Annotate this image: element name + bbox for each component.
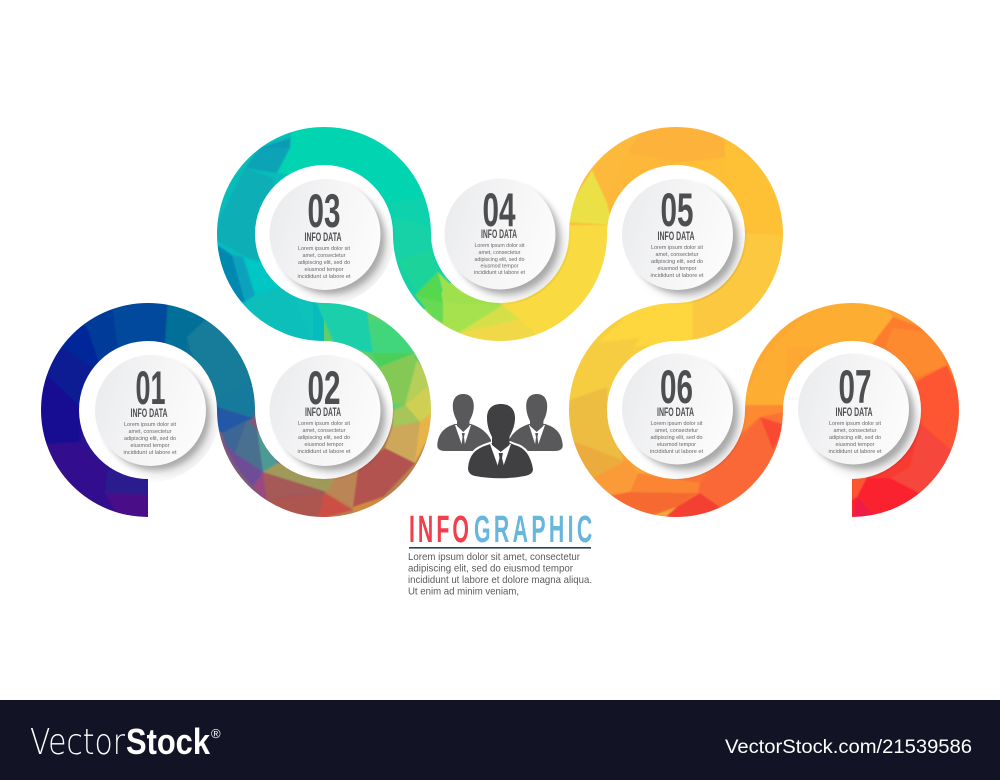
body text: incididunt ut labore et — [124, 450, 177, 456]
body text: eiusmod tempor — [658, 266, 697, 272]
label: INFO DATA — [481, 227, 517, 241]
body text: eiusmod tempor — [657, 442, 696, 448]
body text: adipiscing elit, sed do — [474, 257, 524, 263]
footer logo: Stock — [126, 721, 211, 762]
body text: Lorem ipsum dolor sit — [651, 245, 703, 251]
body text: incididunt ut labore et — [650, 273, 704, 279]
body text — [474, 243, 525, 276]
label: INFO DATA — [130, 406, 168, 420]
body text: Lorem ipsum dolor sit — [650, 421, 703, 427]
body text: amet, consectetur — [302, 428, 346, 434]
description paragraph: incididunt ut labore et dolore magna aliqua. — [408, 575, 592, 586]
number 06: 06 — [660, 361, 693, 414]
description paragraph — [408, 552, 592, 598]
footer logo: ® — [211, 726, 221, 741]
body text: adipiscing elit, sed do — [650, 435, 702, 441]
footer logo: Vector — [30, 722, 125, 763]
disc 05 — [622, 179, 742, 299]
body text: incididunt ut labore et — [828, 449, 882, 455]
description paragraph: adipiscing elit, sed do eiusmod tempor — [408, 564, 573, 574]
body text: Lorem ipsum dolor sit — [829, 421, 881, 427]
label: INFO DATA — [305, 405, 341, 419]
body text: eiusmod tempor — [304, 267, 344, 273]
label: INFO DATA — [304, 230, 342, 244]
body text: amet, consectetur — [302, 253, 346, 259]
disc 02 — [270, 355, 389, 475]
body text — [298, 246, 351, 280]
body text: amet, consectetur — [478, 250, 521, 256]
body text: incididunt ut labore et — [474, 270, 525, 276]
footer logo — [30, 721, 221, 763]
disc 04 — [444, 178, 564, 299]
label: INFO DATA — [657, 405, 694, 419]
label: INFO DATA — [658, 229, 695, 243]
number 04: 04 — [482, 184, 516, 237]
body text: Lorem ipsum dolor sit — [124, 422, 176, 428]
body text: amet, consectetur — [128, 429, 172, 435]
body text — [828, 421, 882, 455]
back left person — [437, 394, 491, 451]
body text — [650, 421, 703, 455]
body text — [298, 421, 351, 455]
body text: adipiscing elit, sed do — [124, 436, 176, 442]
disc 03 — [270, 179, 389, 299]
body text: Lorem ipsum dolor sit — [298, 246, 350, 252]
title: INFOGRAPHIC — [409, 507, 596, 551]
title: INFOGRAPHIC: GRAPHIC — [474, 507, 596, 551]
body text: eiusmod tempor — [130, 443, 170, 449]
number 03: 03 — [308, 185, 340, 238]
body text — [124, 422, 177, 456]
footer image id: VectorStock.com/21539586 — [725, 737, 972, 758]
body text: adipiscing elit, sed do — [651, 259, 703, 265]
body text: adipiscing elit, sed do — [298, 260, 350, 266]
title: INFOGRAPHIC: INFO — [409, 507, 472, 551]
description paragraph: Lorem ipsum dolor sit amet, consectetur — [408, 552, 580, 563]
body text: adipiscing elit, sed do — [829, 435, 881, 441]
body text: amet, consectetur — [655, 428, 698, 434]
number 07: 07 — [838, 361, 872, 414]
number 02: 02 — [308, 362, 340, 415]
body text: incididunt ut labore et — [298, 274, 351, 280]
number 05: 05 — [660, 184, 694, 237]
body text: eiusmod tempor — [836, 442, 875, 448]
disc 06 — [622, 354, 742, 474]
number 01: 01 — [136, 362, 166, 415]
ribbon: low-poly winding band — [30, 120, 965, 530]
body text: Lorem ipsum dolor sit — [474, 243, 525, 249]
body text: eiusmod tempor — [480, 264, 519, 270]
description paragraph: Ut enim ad minim veniam, — [408, 586, 519, 598]
footer bar — [0, 700, 1000, 780]
body text: amet, consectetur — [656, 252, 699, 258]
body text: incididunt ut labore et — [298, 449, 351, 455]
icon: three business people — [437, 394, 563, 479]
back right person — [509, 394, 563, 451]
label: INFO DATA — [836, 405, 873, 419]
body text — [650, 245, 704, 279]
body text: eiusmod tempor — [304, 442, 344, 448]
body text: amet, consectetur — [834, 428, 877, 434]
disc 01 — [95, 355, 214, 475]
body text: adipiscing elit, sed do — [298, 435, 350, 441]
disc 07 — [798, 354, 918, 474]
body text: incididunt ut labore et — [650, 449, 703, 455]
front person — [467, 404, 534, 479]
body text: Lorem ipsum dolor sit — [298, 421, 350, 427]
